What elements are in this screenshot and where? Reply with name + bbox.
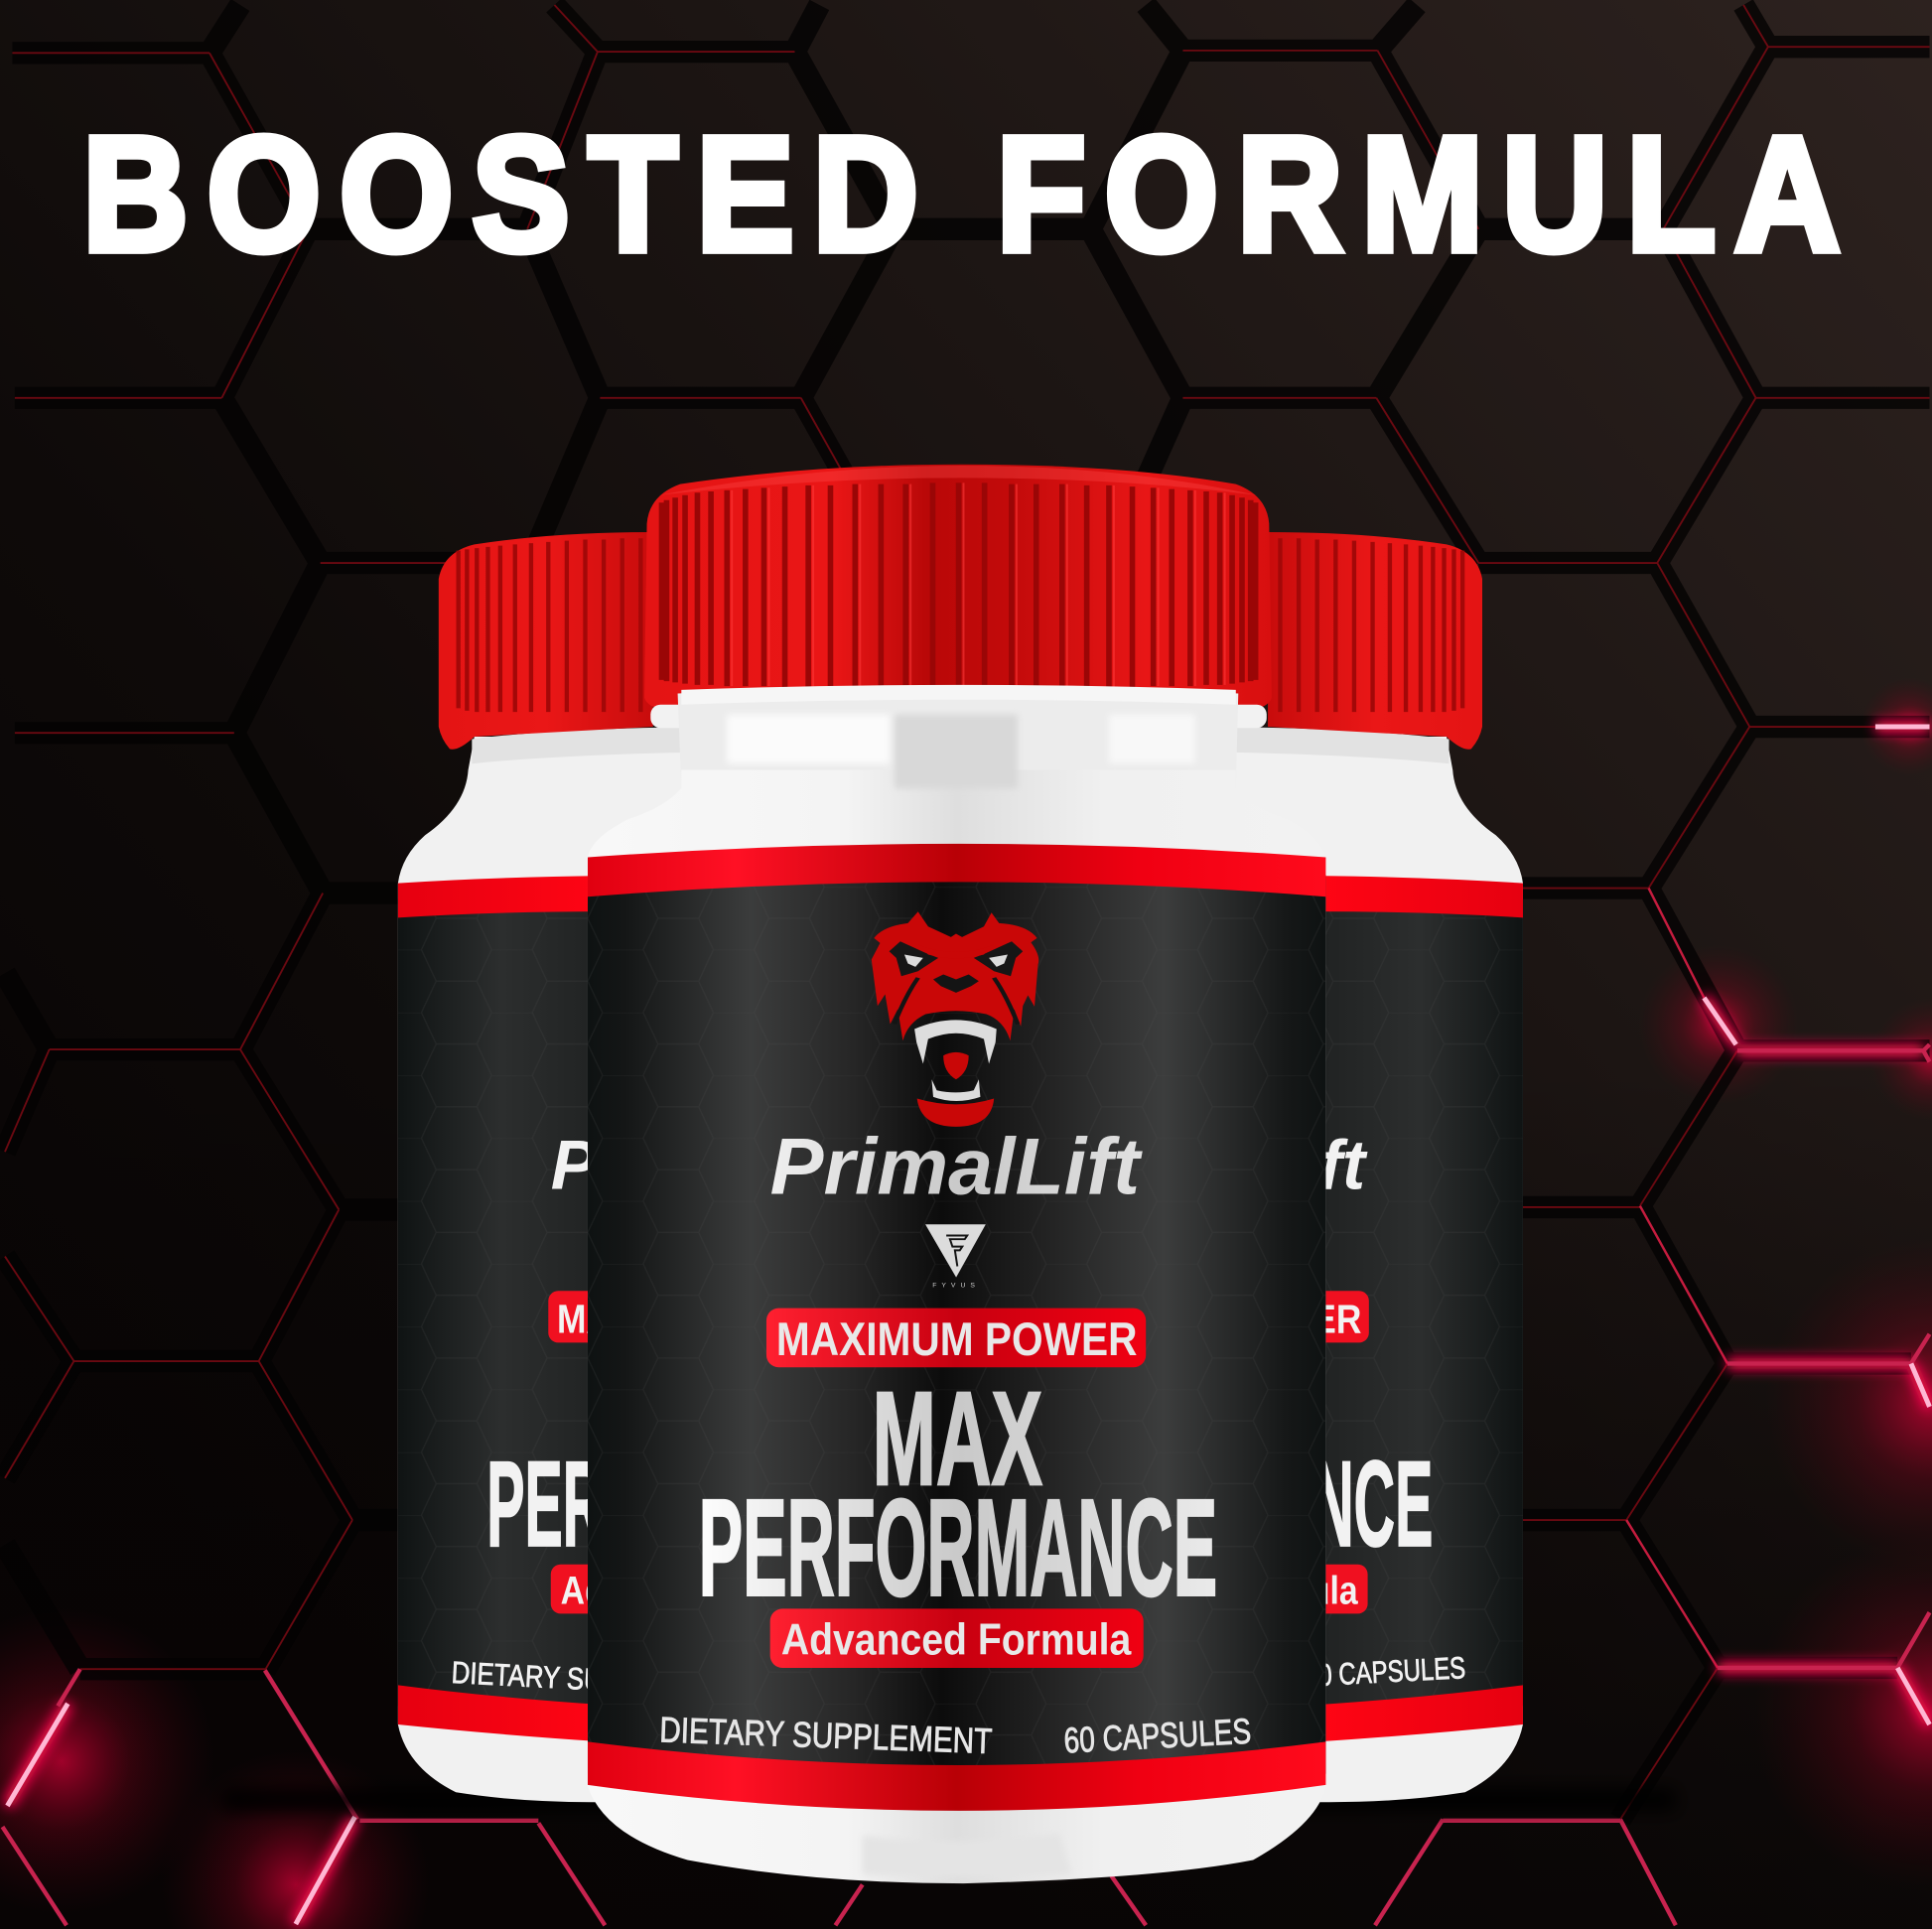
brand fragment: PrimalLift [551,1125,871,1203]
gorilla lower teeth [931,1079,980,1101]
back left top band [398,876,604,917]
back left bottle neck ring [472,727,740,763]
back left label [398,899,604,1706]
maximum power text: MAXIMUM POWER [1047,1296,1361,1341]
text: 60 capsules: 60 CAPSULES [1063,1711,1252,1761]
maximum power pill [548,1291,588,1342]
front bottle body [588,769,1325,1883]
back left bottom band [398,1685,604,1741]
front bottle base highlight [863,1833,1072,1877]
front bottle neck highlights [727,715,1195,788]
back right bottle white body [1181,737,1523,1802]
bottle: front: PERFORMANCE [699,1471,1217,1625]
text: PERFORMANCE [486,1437,932,1573]
bottle: front [588,465,1325,1883]
icon: FYVUS logo: FYVUS [932,1283,980,1290]
maximum power pill [1326,1291,1369,1342]
front bottle cap rib highlights [732,482,1225,687]
advanced pill [1044,1565,1368,1613]
gorilla brow [918,945,994,958]
maximum power text: MAXIMUM POWER [557,1296,871,1341]
advanced text: Advanced Formula [1056,1569,1358,1612]
bottle: back left [398,532,740,1802]
back right label [1317,899,1523,1706]
gorilla muzzle lines [895,978,1018,1025]
advanced pill [550,1565,588,1614]
bottle: back right [1181,532,1523,1802]
back left hex texture [398,899,604,1706]
advanced text: Advanced Formula [561,1569,864,1612]
front label hex texture [588,875,1325,1774]
front bottle cap [644,465,1272,712]
gorilla nose [933,975,979,993]
gorilla tongue [943,1052,969,1079]
brand fragment: PrimalLift [1047,1125,1367,1203]
front bottle neck [678,687,1238,788]
back right hex texture [1317,899,1523,1706]
back right top band [1317,876,1523,917]
icon: FYVUS logo [925,1224,986,1290]
dietary text: DIETARY SUPPLEMENT [451,1655,742,1705]
capsules text: 60 CAPSULES [1305,1650,1466,1694]
title: BOOSTED FORMULA [82,104,1841,286]
front bottle neck top ring [681,685,1236,705]
back right label text [1326,1138,1465,1686]
gorilla eye sockets [890,941,1023,976]
background: glowing neon lines [2,727,1930,1925]
back right bottle cap ribs [1280,538,1462,712]
back left bottle white body [398,737,740,1802]
front bottom band [588,1741,1325,1811]
back right label text: PERFORMANCE [987,1437,1433,1573]
heading: max: MAX [873,1365,1042,1513]
back right bottom band [1317,1685,1523,1741]
back left bottle cap ribs [459,538,640,712]
back left label text [453,1141,588,1690]
pill: maximum power: MAXIMUM POWER [776,1312,1138,1365]
back right bottle neck ring [1181,727,1449,763]
back left bottle cap [439,532,653,750]
icon: gorilla logo [872,911,1038,1127]
front bottle cap rim shine [659,466,1257,495]
text: dietary supplement: DIETARY SUPPLEMENT [659,1709,993,1761]
back right bottle cap [1268,532,1482,750]
front bottle cap ribs [661,482,1256,687]
gorilla head [872,911,1038,1040]
gorilla upper teeth [914,1020,997,1064]
brand name: PrimalLift [770,1122,1143,1211]
pill: advanced formula: Advanced Formula [781,1615,1132,1664]
shadow under bottles [221,1789,1676,1811]
gorilla eyes [904,955,1008,967]
front bottle neck lip [650,705,1267,728]
background: red glows [0,677,1932,1929]
front label [588,875,1325,1774]
gorilla chin [917,1099,994,1127]
front top band [588,844,1325,896]
